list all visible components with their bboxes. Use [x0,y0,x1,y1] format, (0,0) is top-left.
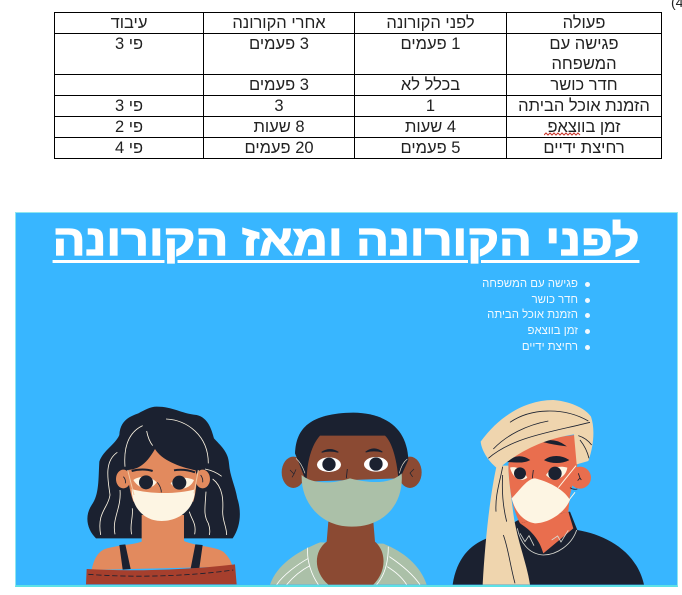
table: activities before and after corona: 3 פעמים [249,35,309,53]
table: activities before and after corona: לפני הקורונה [386,14,475,32]
table: activities before and after corona: 20 פעמים [244,139,314,157]
spell-check squiggle [544,132,580,136]
table: activities before and after corona: 3 פעמים [249,76,309,94]
bullet list: חדר כושר [532,294,578,306]
table: activities before and after corona: עיבוד [111,14,147,32]
illustration: woman with mask [86,407,240,584]
table: activities before and after corona: פי 4 [115,139,143,157]
table: activities before and after corona: הזמנת אוכל הביתה [518,97,650,115]
table: activities before and after corona: 3 [274,97,284,115]
table: activities before and after corona: פי 2 [115,118,143,136]
table: activities before and after corona: המשפחה [551,55,617,73]
title: לפני הקורונה ומאז הקורונה [53,217,639,265]
table: activities before and after corona: 5 פעמים [401,139,460,157]
table: activities before and after corona: חדר כושר [550,76,618,94]
table: activities before and after corona: פי 3 [115,35,143,53]
panel: blue slide [15,212,678,587]
bullet list: הזמנת אוכל הביתה [487,309,578,321]
bullet list: פגישה עם המשפחה [482,278,578,290]
table: activities before and after corona: פגישה עם [549,35,619,53]
table: activities before and after corona [54,12,662,159]
bullet list: זמן בווצאפ [528,325,578,337]
illustration: man with green mask [270,413,427,585]
table: activities before and after corona: זמן בווצאפ [547,118,621,136]
table: activities before and after corona: פי 3 [115,97,143,115]
table: activities before and after corona: 1 [426,97,435,115]
table: activities before and after corona: פעולה [563,14,605,32]
bullet list [482,278,590,353]
bullet list: רחיצת ידיים [522,341,578,353]
table: activities before and after corona: 1 פעמים [401,35,460,53]
table: activities before and after corona: אחרי הקורונה [232,14,326,32]
illustration: man with turban [453,400,644,585]
table: activities before and after corona: רחיצת ידיים [543,139,625,157]
table: activities before and after corona: 8 שעות [253,118,305,136]
table: activities before and after corona: 4 שעות [405,118,456,136]
table: activities before and after corona: בכלל לא [401,76,460,94]
